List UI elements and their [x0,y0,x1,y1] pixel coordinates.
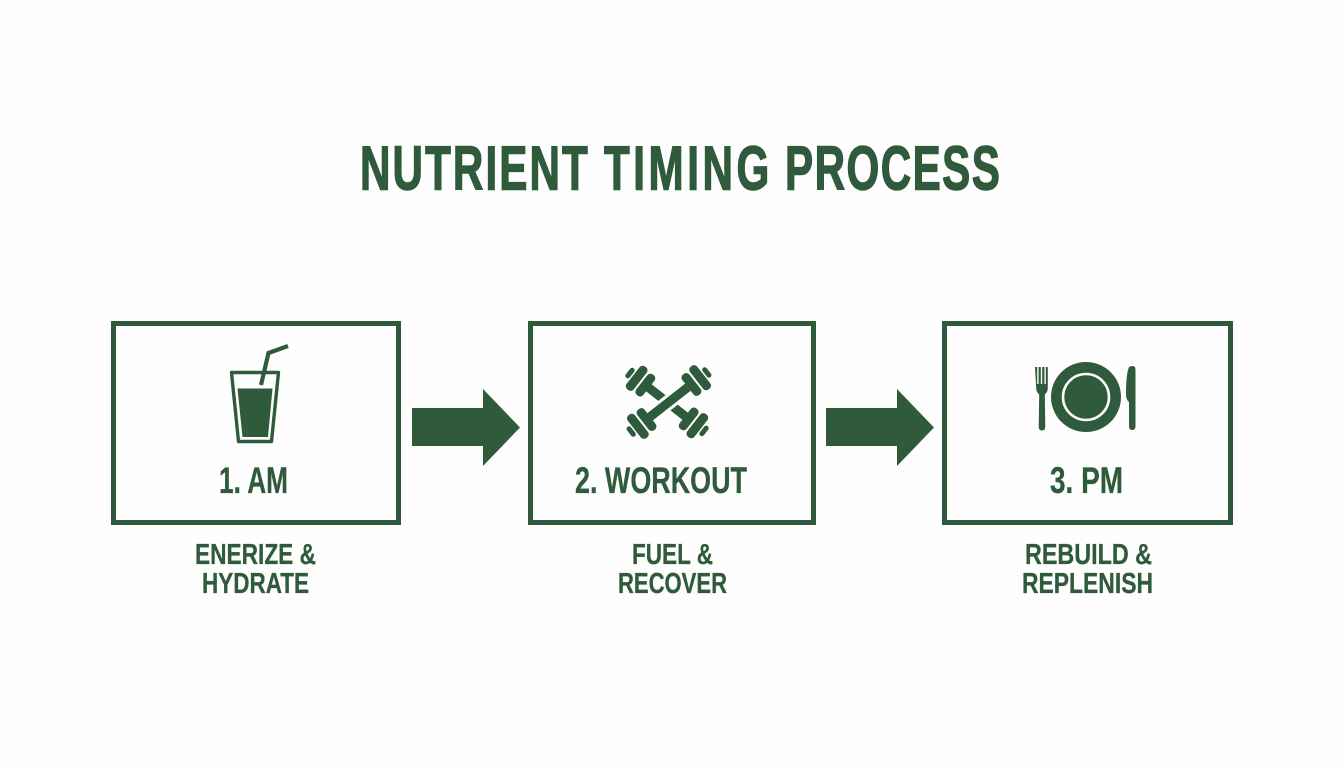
caption: Rebuild and Replenish [1022,539,1153,600]
caption: Fuel and Recover: RECOVER [618,568,727,600]
caption: Fuel and Recover: FUEL & [632,539,713,571]
panel: step 2 Workout [530,324,814,600]
box: step 1 [114,324,398,522]
box: step 3 [944,324,1230,522]
caption: Rebuild and Replenish: REPLENISH [1022,568,1153,600]
step label: 2. Workout: 2. WORKOUT [575,460,747,501]
arrow: step 2 to step 3 [826,389,934,466]
arrow: step 1 to step 2 [412,389,520,466]
panel: step 3 PM [944,324,1230,600]
panel: step 1 AM [114,324,398,600]
icon: glass with straw [232,346,288,442]
caption: Enerize and Hydrate: ENERIZE & [195,539,316,571]
title: TIMING [604,135,769,204]
step label: 3. PM: 3. PM [1050,460,1123,501]
icon: fork, plate and knife [1035,362,1136,432]
box: step 2 [530,324,814,522]
caption: Rebuild and Replenish: REBUILD & [1025,539,1152,571]
icon: crossed dumbbells [619,359,718,445]
step label: 1. AM: 1. AM [219,460,288,501]
title [360,135,1000,204]
title: PROCESS [785,135,1000,204]
caption: Enerize and Hydrate [195,539,316,600]
caption: Fuel and Recover [618,539,727,600]
caption: Enerize and Hydrate: HYDRATE [202,568,309,600]
title: NUTRIENT [360,135,588,204]
